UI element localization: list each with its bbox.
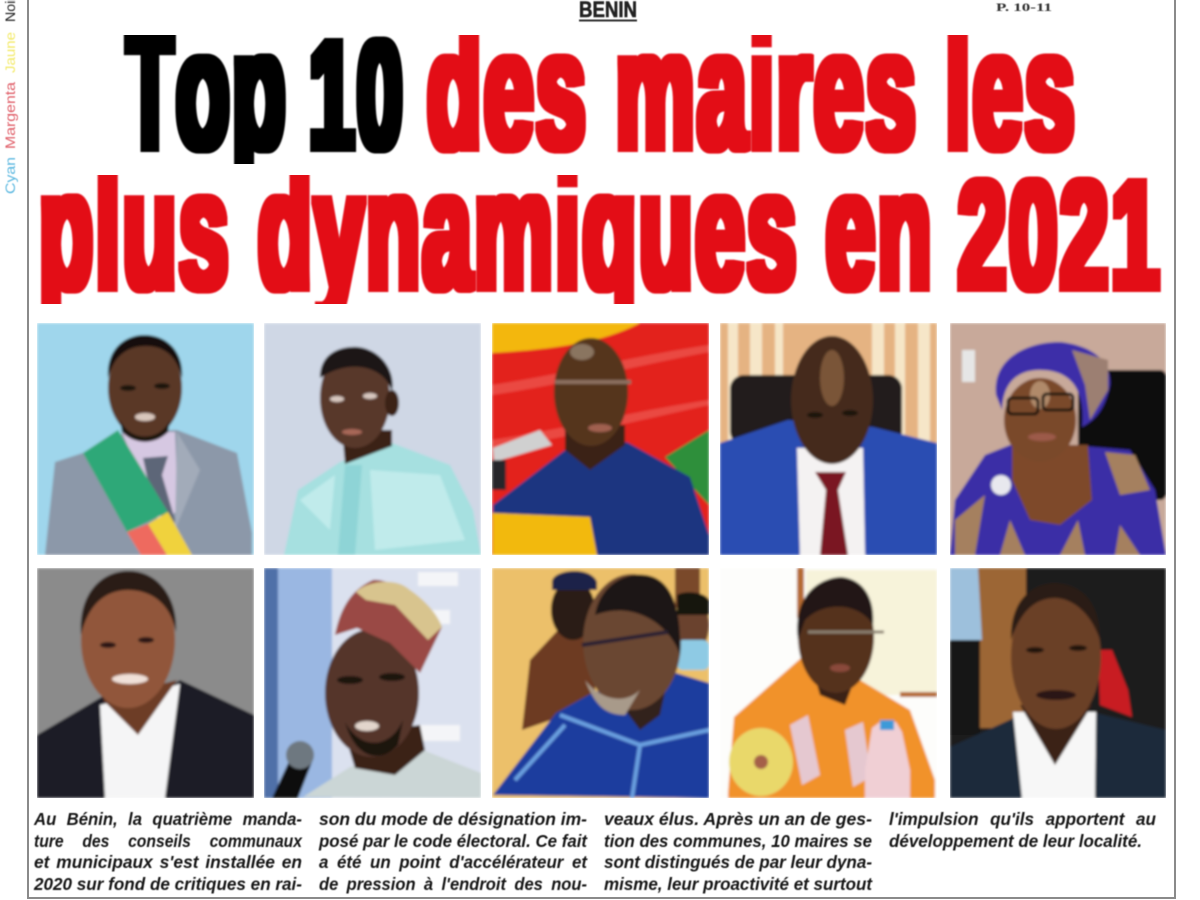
page reference: P. 10-11	[996, 0, 1052, 14]
title line 1: T	[127, 0, 175, 184]
printer colour marks	[2, 0, 18, 194]
column 2: son du mode de désignation im-	[319, 809, 587, 829]
portrait 8: mayor in blue robe with glasses	[492, 568, 709, 798]
column 2: de pression à l'endroit des nou-	[319, 874, 587, 894]
column 1: et municipaux s'est installée en	[34, 852, 302, 872]
column 1: ture des conseils communaux	[34, 831, 303, 851]
column 2	[318, 809, 588, 894]
portrait 6: smiling mayor in black jacket	[37, 568, 254, 798]
column 2: posé par le code électoral. Ce fait	[318, 831, 588, 851]
title number 10: 10	[309, 9, 405, 181]
column 1	[33, 809, 303, 894]
title line 1: op	[176, 0, 288, 184]
portrait 4: mayor in blue suit and red tie	[720, 323, 937, 555]
portrait 2: mayor in pale blue robe	[264, 323, 481, 555]
column 3: tion des communes, 10 maires se	[604, 831, 872, 851]
printer colour marks: Margenta	[2, 82, 18, 149]
printer colour marks: Cyan	[2, 157, 18, 194]
portrait 9: mayor in orange patterned shirt with water bottle	[720, 568, 937, 798]
column 4	[889, 809, 1156, 851]
portrait 3: mayor speaking before a flag	[492, 323, 709, 555]
printer colour marks: Jaune	[2, 32, 18, 73]
column 1: 2020 sur fond de critiques en rai-	[33, 874, 302, 894]
portrait 5: woman mayor with blue headwrap	[950, 323, 1166, 555]
title line 1	[122, 35, 1076, 164]
column 4: l'impulsion qu'ils apportent au	[889, 809, 1156, 829]
portrait 10: mayor in dark navy jacket	[950, 568, 1166, 798]
column 3: misme, leur proactivité et surtout	[604, 874, 873, 894]
portrait 1: mayor with green yellow red sash	[37, 323, 254, 555]
main title	[40, 35, 1162, 304]
column 2: a été un point d'accélérateur et	[319, 852, 588, 872]
column 1: Au Bénin, la quatrième manda-	[33, 809, 302, 829]
column 4: développement de leur localité.	[889, 831, 1142, 851]
article text	[33, 809, 1156, 894]
column 3: sont distingués de par leur dyna-	[604, 852, 872, 872]
portrait 7: mayor in embroidered cap at a microphone	[264, 568, 481, 798]
column 3: veaux élus. Après un an de ges-	[604, 809, 872, 829]
column 3	[604, 809, 873, 894]
